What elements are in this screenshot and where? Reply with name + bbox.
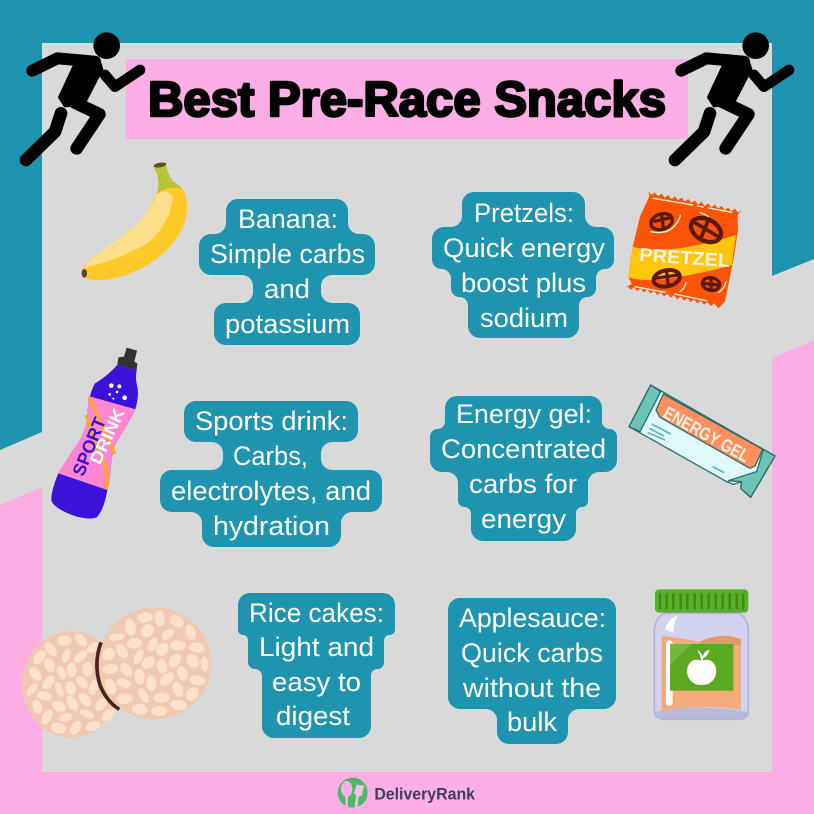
text box: pretzels [432, 192, 614, 338]
text box: rice cakes [238, 593, 395, 738]
icon: energy gel packet [629, 385, 775, 497]
text box: banana: Simple carbs [210, 239, 365, 269]
text box: rice cakes: Light and [259, 632, 374, 662]
text box: applesauce: Applesauce: [459, 603, 606, 633]
text box: pretzels: boost plus [461, 268, 586, 298]
text box: sports drink: Carbs, [233, 441, 308, 471]
icon: energy gel packet: ENERGY GEL [660, 403, 753, 466]
icon: pretzel bag: PRETZEL [639, 244, 731, 271]
icon: right runner [675, 32, 789, 160]
icon: applesauce jar [654, 589, 748, 719]
text box: applesauce: without the [462, 673, 601, 703]
text box: banana: potassium [225, 309, 350, 339]
text box: banana: and [264, 274, 310, 304]
text box: applesauce: bulk [507, 707, 558, 737]
icon: sports drink bottle [51, 348, 138, 519]
icon: sports drink bottle: SPORT [68, 414, 110, 479]
text box: energy gel: carbs for [469, 469, 577, 499]
icon: rice cakes [22, 607, 211, 738]
text box: rice cakes: Rice cakes: [249, 598, 384, 628]
text box: banana: Banana: [238, 204, 338, 234]
text box: pretzels: sodium [480, 303, 568, 333]
text box: energy gel: Energy gel: [456, 399, 592, 429]
text box: banana [199, 199, 375, 345]
text box: applesauce [448, 598, 616, 744]
title banner [126, 59, 688, 139]
text box: energy gel [430, 396, 617, 541]
text box: rice cakes: easy to [272, 667, 361, 697]
icon: sports drink bottle: DRINK [85, 405, 129, 467]
icon: left runner [26, 32, 140, 160]
text box: sports drink: electrolytes, and [171, 476, 371, 506]
text box: applesauce: Quick carbs [461, 638, 603, 668]
text box: pretzels: Quick energy [443, 233, 606, 263]
text box: energy gel: energy [481, 504, 567, 534]
text box: energy gel: Concentrated [441, 434, 606, 464]
text box: rice cakes: digest [276, 701, 350, 731]
text box: sports drink: hydration [213, 511, 330, 541]
footer logo: DeliveryRank [338, 778, 476, 808]
text box: pretzels: Pretzels: [474, 198, 574, 228]
text box: sports drink [160, 401, 382, 547]
text box: sports drink: Sports drink: [195, 406, 348, 436]
title banner: Best Pre-Race Snacks [148, 73, 666, 127]
footer logo: DeliveryRank: DeliveryRank [374, 785, 476, 803]
icon: pretzel bag [624, 191, 742, 308]
icon: banana [82, 162, 187, 280]
